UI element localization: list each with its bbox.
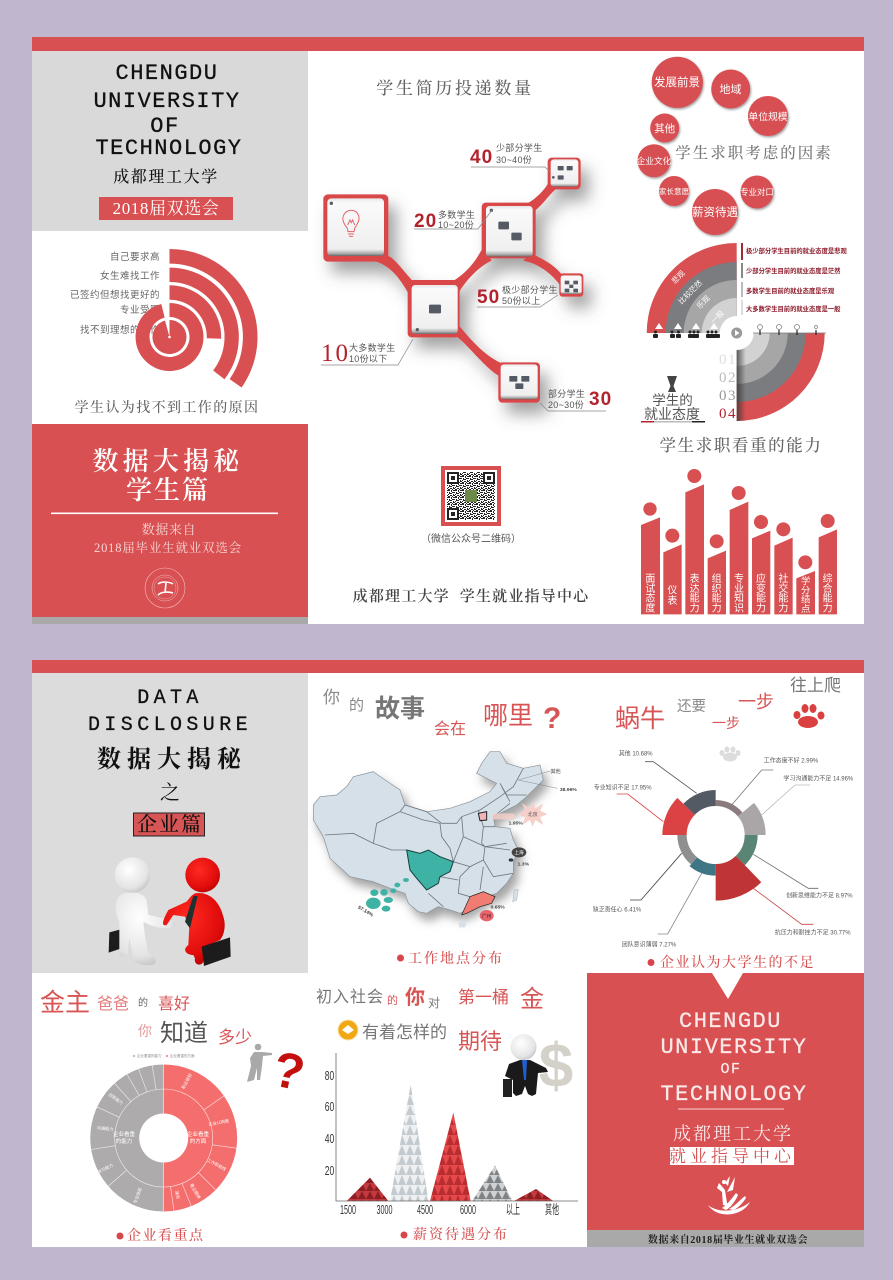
title: salary expectation: 有着怎样的 — [362, 1023, 447, 1042]
panel: data disclosure: 企业篇 — [137, 813, 203, 836]
chart: valued abilities bars: 度 — [645, 601, 655, 614]
chart: reasons students cannot find work: 已签约但想找更好的 — [70, 289, 160, 301]
chart: valued abilities bars: 面 — [645, 574, 655, 585]
caption: employer views: 企业认为大学生的不足 — [660, 954, 815, 971]
region: Sichuan — [407, 850, 453, 890]
chart: China work location map — [313, 752, 577, 927]
title: where will your story be: 你 — [323, 688, 340, 707]
number: 20: 20 — [414, 211, 437, 232]
chart: valued abilities bars: 表 — [690, 572, 700, 585]
chart: valued abilities bars: 织 — [712, 583, 722, 595]
chart: employer focus sunburst: 专业技能 — [131, 1186, 144, 1205]
numbers: quadrant index: 02 — [719, 370, 737, 386]
title: employer preferences — [40, 989, 252, 1047]
title: snail climbing: 一步 — [738, 692, 774, 712]
text: QR caption: （微信公众号二维码） — [421, 532, 521, 545]
chart: employer views of shortcomings: 创新思维能力不足 8.97% — [786, 892, 853, 900]
icon: figure with question mark — [247, 1041, 310, 1102]
chart: employer focus sunburst: 职业规划 — [180, 1072, 194, 1090]
title: employer preferences: 知道 — [160, 1020, 208, 1047]
chart: reasons students cannot find work — [70, 251, 250, 383]
number: 50: 50 — [477, 287, 500, 308]
callout: Beijing burst: 1.95% — [509, 821, 523, 827]
chart: resume count network: 30~40份 — [496, 154, 532, 165]
chart: job factors bubbles: 家长意愿 — [659, 186, 690, 196]
legend: attitude descriptions: 大多数学生目前的就业态度是一般 — [746, 304, 841, 313]
chart: valued abilities bars: 力 — [778, 601, 788, 614]
chart: resume count network: 部分学生 — [548, 388, 585, 399]
title: salary expectation: 对 — [428, 996, 440, 1010]
panel: career guidance center: OF — [720, 1061, 742, 1078]
title: employer preferences: 金主 — [40, 989, 90, 1017]
callout: Beijing burst — [492, 801, 547, 827]
chart: valued abilities bars: 应 — [756, 572, 766, 585]
chart: salary distribution: 40 — [325, 1131, 334, 1146]
chart: salary distribution: 1500 — [340, 1202, 356, 1217]
chart: valued abilities bars: 分 — [801, 585, 810, 595]
icon: grey paw — [720, 746, 740, 762]
title: where will your story be: 故事 — [375, 695, 425, 723]
chart: job factors bubbles: 薪资待遇 — [692, 205, 738, 219]
panel: data disclosure: 之 — [160, 781, 180, 804]
chart: valued abilities bars: 绩 — [801, 594, 810, 605]
title: employer preferences: 爸爸 — [97, 995, 129, 1013]
numbers: quadrant index: 04 — [719, 406, 737, 422]
chart: valued abilities bars: 专 — [734, 572, 744, 585]
title: salary expectation: 的 — [387, 993, 398, 1007]
chart: employer focus sunburst: 企业认同度 — [208, 1117, 230, 1128]
chart: valued abilities bars: 表 — [667, 594, 677, 607]
chart: employer focus sunburst: 的能力 — [116, 1137, 132, 1145]
chart: resume count network: 大多数学生 — [349, 342, 396, 353]
chart: valued abilities bars: 力 — [690, 601, 700, 614]
chart: employer focus sunburst: 企业看重 — [187, 1130, 209, 1138]
panel: university title: TECHNOLOGY — [95, 136, 243, 161]
title: salary expectation — [316, 986, 544, 1054]
callout: Beijing burst: 北京 — [528, 811, 538, 818]
chart: employer focus sunburst: 敬业精神 — [188, 1182, 203, 1200]
title: employer preferences: 多少 — [218, 1028, 252, 1047]
chart: resume count network: 10~20份 — [438, 219, 474, 230]
caption: salary: 薪资待遇分布 — [413, 1226, 509, 1243]
number: 10: 10 — [321, 340, 350, 367]
legend: sunburst: 企业看重的方面 — [170, 1053, 195, 1058]
icon: ticks row — [753, 324, 826, 335]
chart: valued abilities bars: 能 — [778, 592, 788, 605]
chart: reasons students cannot find work: 专业受限 — [120, 304, 160, 316]
title: snail climbing: 还要 — [677, 698, 706, 715]
chart: salary distribution: 3000 — [376, 1202, 392, 1217]
callout: Sichuan paw — [357, 878, 409, 919]
legend: sunburst — [133, 1053, 195, 1058]
callout: Shanghai: 上海 — [514, 849, 524, 856]
icon: businessman with dollar — [503, 1032, 573, 1101]
chart: valued abilities bars: 变 — [756, 582, 766, 595]
panel: student data cover — [32, 424, 308, 624]
panel: data disclosure — [32, 673, 308, 973]
bottom sheet background — [32, 660, 864, 1247]
chart: employer focus sunburst: 沟通能力 — [96, 1124, 114, 1133]
title: snail climbing: 一步 — [712, 715, 740, 731]
chart: resume count network — [321, 142, 612, 411]
map outline — [313, 752, 543, 913]
chart: salary distribution: 20 — [325, 1163, 334, 1178]
legend: sunburst: 企业看重的能力 — [137, 1053, 162, 1058]
title: employer preferences: 你 — [138, 1023, 152, 1039]
panel: career guidance center: UNIVERSITY — [660, 1035, 808, 1060]
chart: valued abilities bars: 社 — [778, 572, 788, 585]
icon: gold coin — [338, 1020, 358, 1040]
chart: valued abilities bars: 能 — [712, 592, 722, 605]
chart: employment attitude quadrants: 比较茫然 — [676, 277, 704, 306]
chart: reasons students cannot find work: 女生难找工作 — [100, 270, 160, 282]
chart: valued abilities bars: 能 — [756, 592, 766, 605]
chart: resume count network: 极少部分学生 — [502, 284, 558, 295]
region: Guangdong — [462, 892, 495, 915]
chart: job factors bubbles — [637, 57, 788, 235]
chart: reasons students cannot find work: 找不到理想的工作 — [80, 324, 160, 336]
chart: resume count network: 20~30份 — [548, 399, 584, 410]
chart: salary distribution: 80 — [325, 1068, 334, 1083]
legend: attitude descriptions: 多数学生目前的就业态度是乐观 — [746, 286, 835, 295]
title: snail climbing — [615, 676, 841, 733]
icon: envelopes — [330, 166, 578, 389]
heading: student attitude with trophy — [641, 376, 705, 422]
title: salary expectation: 期待 — [458, 1029, 502, 1054]
title: snail climbing: 蜗牛 — [615, 705, 665, 733]
title: where will your story be: ? — [543, 702, 561, 735]
chart: employer views of shortcomings: 抗压力和耐挫力不足 30.77% — [775, 928, 851, 936]
chart: employer focus sunburst: 工作积极性 — [206, 1157, 228, 1173]
panel: university title: OF — [150, 114, 180, 139]
numbers: quadrant index: 01 — [719, 352, 737, 368]
chart: reasons students cannot find work: 自己要求高 — [110, 251, 160, 263]
chart: valued abilities bars: 力 — [756, 601, 766, 614]
chart: employer views of shortcomings: 专业知识不足 17.95% — [594, 783, 652, 791]
numbers: quadrant index: 03 — [719, 388, 737, 404]
chart: salary distribution — [325, 1053, 578, 1217]
title: where will your story be: 会在 — [434, 720, 466, 738]
panel: university title: CHENGDU — [116, 61, 218, 86]
chart: valued abilities bars: 达 — [690, 583, 700, 595]
chart: valued abilities bars: 能 — [690, 592, 700, 605]
heading: valued abilities: 学生求职看重的能力 — [660, 436, 822, 455]
chart: job factors bubbles: 发展前景 — [654, 75, 700, 89]
chart: employment attitude quadrants: 乐观 — [694, 293, 712, 311]
chart: employer views of shortcomings: 缺乏责任心 6.41% — [593, 906, 642, 914]
panel: career guidance center: 成都理工大学 — [673, 1124, 793, 1144]
callout: Shanghai — [509, 847, 530, 867]
chart: job factors bubbles: 专业对口 — [740, 187, 774, 197]
chart: valued abilities bars: 学 — [801, 575, 810, 586]
panel: career guidance center: TECHNOLOGY — [660, 1082, 808, 1107]
chart: valued abilities bars: 能 — [823, 592, 833, 605]
chart: employer focus sunburst: 企业看重 — [113, 1130, 135, 1138]
top sheet background — [32, 37, 864, 624]
callout: other regions: 38.96% — [560, 787, 577, 793]
heading: reasons chart caption: 学生认为找不到工作的原因 — [75, 399, 259, 416]
title: where will your story be: 的 — [349, 697, 364, 714]
chart: valued abilities bars: 态 — [645, 592, 655, 605]
heading: student attitude with trophy: 学生的 — [652, 393, 693, 408]
chart: job factors bubbles: 其他 — [654, 122, 676, 135]
title: snail climbing: 往上爬 — [790, 676, 841, 695]
chart: employer views of shortcomings: 团队意识薄弱 7.27% — [622, 940, 677, 948]
chart: valued abilities bars — [641, 469, 837, 614]
panel: university title: UNIVERSITY — [93, 89, 241, 114]
title: salary expectation: 金 — [520, 986, 544, 1013]
icon: play button — [731, 328, 742, 338]
chart: employment attitude quadrants — [647, 243, 826, 421]
title: salary expectation: 你 — [405, 986, 425, 1009]
chart: salary distribution: 60 — [325, 1099, 334, 1114]
legend: attitude descriptions: 少部分学生目前的就业态度是茫然 — [746, 266, 841, 275]
chart: valued abilities bars: 交 — [778, 582, 788, 595]
panel: student data cover: 2018届毕业生就业双选会 — [94, 540, 242, 555]
panel: career guidance center: 就业指导中心 — [669, 1147, 795, 1166]
numbers: quadrant index — [719, 352, 737, 422]
icon: people row — [653, 323, 720, 338]
title: where will your story be: 哪里 — [483, 702, 533, 730]
icon: university seal — [145, 568, 185, 608]
chart: valued abilities bars: 试 — [645, 582, 655, 595]
callout: other regions — [518, 768, 577, 793]
panel: student data cover: 数据大揭秘 — [92, 447, 244, 476]
text: employment center: 成都理工大学 学生就业指导中心 — [353, 587, 590, 605]
title: salary expectation: 第一桶 — [458, 988, 509, 1007]
panel: university title: 2018届双选会 — [113, 199, 219, 218]
heading: resume count: 学生简历投递数量 — [376, 79, 534, 98]
chart: valued abilities bars: 仪 — [667, 584, 677, 596]
chart: employer views of shortcomings: 学习沟通能力不足 14.96% — [783, 774, 854, 782]
chart: job factors bubbles: 单位规模 — [748, 110, 788, 123]
panel: data disclosure: 数据大揭秘 — [97, 746, 247, 773]
chart: valued abilities bars: 组 — [712, 572, 722, 585]
chart: employer focus sunburst: 学习能力 — [96, 1162, 114, 1176]
chart: resume count network: 多数学生 — [438, 209, 475, 220]
icon: light bulb — [343, 210, 359, 236]
chart: employer views of shortcomings — [593, 749, 854, 948]
icon: red paw — [794, 704, 824, 728]
chart: salary distribution: 4500 — [417, 1202, 433, 1217]
chart: valued abilities bars: 业 — [734, 583, 744, 595]
icon: businessman with dollar: $ — [539, 1032, 573, 1101]
panel: university title — [32, 51, 308, 231]
icon: QR code — [441, 466, 501, 526]
panel: data disclosure: DATA — [137, 687, 203, 710]
chart: resume count network: 少部分学生 — [496, 142, 543, 153]
chart: employment attitude quadrants: 悲观 — [669, 268, 687, 286]
callout: Shanghai: 1.3% — [518, 861, 530, 867]
panel: career guidance center: 数据来自2018届毕业生就业双选会 — [648, 1233, 808, 1246]
callout: other regions: 其他 — [551, 768, 561, 775]
chart: resume count network: 50份以上 — [502, 295, 541, 306]
panel: career guidance center: CHENGDU — [679, 1009, 782, 1034]
icon: figure with question mark: ? — [268, 1041, 310, 1102]
chart: employer views of shortcomings: 工作态度不好 2.99% — [764, 756, 819, 764]
caption: employer focus: 企业看重点 — [127, 1227, 204, 1244]
chart: salary distribution: 其他 — [545, 1202, 559, 1217]
number: 30: 30 — [589, 389, 612, 410]
chart: valued abilities bars: 识 — [734, 602, 744, 614]
chart: job factors bubbles: 地域 — [720, 83, 742, 96]
title: salary expectation: 初入社会 — [316, 988, 384, 1006]
caption: work location: 工作地点分布 — [408, 950, 504, 967]
legend: attitude descriptions: 极少部分学生目前的就业态度是悲观 — [746, 246, 847, 255]
callout: Guangzhou — [480, 905, 505, 921]
title: employer preferences: 的 — [138, 996, 148, 1009]
title: employer preferences: 喜好 — [158, 995, 190, 1013]
heading: job factors: 学生求职考虑的因素 — [675, 144, 833, 162]
chart: employer views of shortcomings: 其他 10.68% — [619, 749, 653, 757]
chart: valued abilities bars: 力 — [712, 601, 722, 614]
callout: Guangzhou: 0.65% — [491, 905, 505, 911]
chart: valued abilities bars: 综 — [823, 572, 833, 585]
chart: salary distribution: 以上 — [506, 1202, 520, 1217]
legend: attitude descriptions — [741, 243, 847, 315]
chart: employer focus sunburst — [90, 1064, 237, 1212]
panel: university title: 成都理工大学 — [113, 168, 219, 186]
icon: handshake figures — [109, 857, 231, 966]
chart: salary distribution: 6000 — [460, 1202, 476, 1217]
chart: employment attitude quadrants: 一般 — [708, 308, 726, 326]
chart: resume count network: 10份以下 — [349, 353, 388, 364]
chart: job factors bubbles: 企业文化 — [637, 155, 672, 166]
chart: employer focus sunburst: 创新能力 — [107, 1091, 125, 1106]
number: 40: 40 — [470, 147, 493, 168]
panel: student data cover: 学生篇 — [126, 476, 210, 505]
chart: valued abilities bars: 合 — [823, 582, 833, 595]
heading: student attitude with trophy: 就业态度 — [644, 406, 700, 422]
panel: career guidance center — [587, 973, 864, 1247]
chart: valued abilities bars: 点 — [801, 604, 810, 614]
icon: guidance center logo — [708, 1176, 750, 1214]
chart: employer focus sunburst: 的方面 — [190, 1137, 207, 1145]
title: where will your story be — [323, 688, 561, 738]
panel: student data cover: 数据来自 — [142, 522, 196, 537]
panel: data disclosure: DISCLOSURE — [88, 714, 252, 737]
chart: valued abilities bars: 力 — [823, 601, 833, 614]
chart: employer focus sunburst: 诚信 — [173, 1190, 182, 1199]
callout: Sichuan paw: 57.14% — [357, 905, 375, 919]
chart: valued abilities bars: 知 — [734, 592, 744, 605]
callout: Guangzhou: 广州 — [482, 912, 492, 919]
